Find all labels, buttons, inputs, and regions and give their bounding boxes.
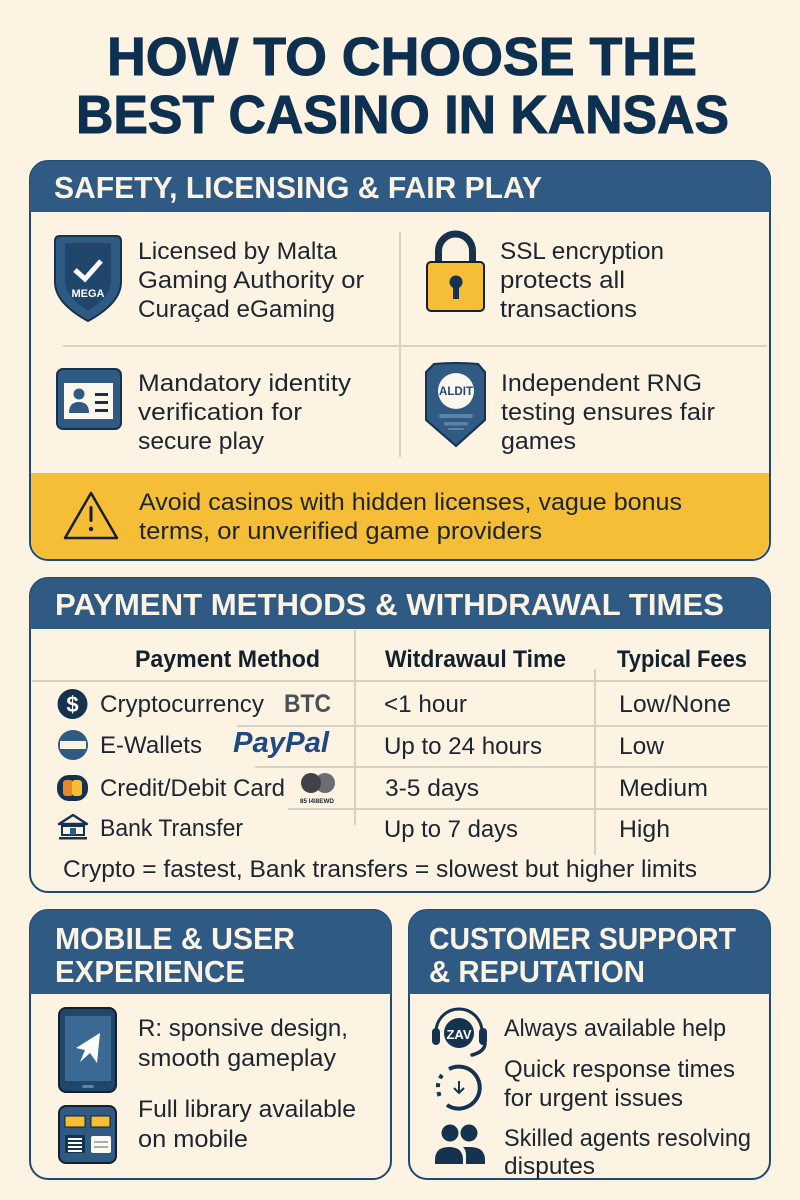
warning band bbox=[31, 473, 769, 559]
row: cryptocurrency: <1 hour bbox=[384, 691, 467, 718]
panel: customer support and reputation bbox=[409, 910, 770, 1180]
text: responsive: R: sponsive design, bbox=[138, 1015, 348, 1042]
row: cryptocurrency bbox=[58, 689, 731, 719]
table header: Typical Fees bbox=[617, 646, 747, 673]
text: licensed: Curaçad eGaming bbox=[138, 296, 335, 323]
row: e-wallets: Up to 24 hours bbox=[384, 733, 542, 760]
text: identity: Mandatory identity bbox=[138, 370, 351, 397]
table header: Witdrawaul Time bbox=[385, 646, 566, 673]
text: ssl: SSL encryption bbox=[500, 238, 664, 265]
heading: payment methods: PAYMENT METHODS & WITHDRAWAL TIMES bbox=[55, 587, 724, 622]
row: bank transfer: Bank Transfer bbox=[100, 815, 243, 842]
icon: dollar coin bbox=[58, 689, 88, 719]
icon: headset bbox=[432, 1009, 487, 1055]
text: responsive: smooth gameplay bbox=[138, 1045, 336, 1072]
text: rng: testing ensures fair bbox=[501, 399, 715, 426]
text: agents: disputes bbox=[504, 1153, 595, 1180]
text: licensed bbox=[138, 238, 364, 323]
text: library: Full library available bbox=[138, 1096, 356, 1123]
row: credit card: Credit/Debit Card bbox=[100, 775, 285, 802]
text: agents bbox=[504, 1125, 751, 1180]
icon: MEGA shield bbox=[55, 236, 121, 321]
row: e-wallets: Low bbox=[619, 733, 665, 760]
text: response: Quick response times bbox=[504, 1056, 735, 1083]
text: rng: Independent RNG bbox=[501, 370, 702, 397]
text: rng bbox=[501, 370, 715, 455]
icon: agents bbox=[435, 1124, 485, 1164]
heading: support bbox=[409, 910, 770, 994]
table header bbox=[135, 646, 747, 673]
icon: audit shield bbox=[426, 363, 485, 446]
icon: clock bbox=[438, 1067, 480, 1109]
row: bank transfer bbox=[59, 815, 670, 843]
row: cryptocurrency: Low/None bbox=[619, 691, 731, 718]
text: responsive bbox=[138, 1015, 348, 1072]
icon: bank bbox=[59, 815, 87, 840]
text: agents: Skilled agents resolving bbox=[504, 1125, 751, 1152]
warning text: terms, or unverified game providers bbox=[139, 518, 542, 545]
icon: dollar coin: $ bbox=[66, 692, 79, 717]
icon: card brand logo: 85 I4I8EWD bbox=[300, 799, 335, 805]
text: identity: secure play bbox=[138, 428, 264, 455]
text: library: on mobile bbox=[138, 1126, 248, 1153]
text: licensed: Licensed by Malta bbox=[138, 238, 338, 265]
icon: card coin bbox=[57, 775, 88, 801]
heading: support: & REPUTATION bbox=[429, 954, 645, 989]
text: ssl: transactions bbox=[500, 296, 637, 323]
heading: mobile: MOBILE & USER bbox=[55, 921, 295, 956]
icon: ID card bbox=[57, 369, 121, 429]
text: rng: games bbox=[501, 428, 576, 455]
text: library bbox=[138, 1096, 356, 1153]
row: bank transfer: High bbox=[619, 816, 670, 843]
heading: mobile bbox=[30, 910, 391, 994]
row: cryptocurrency: Cryptocurrency bbox=[100, 691, 264, 718]
icon: tablet bbox=[59, 1008, 116, 1092]
title: HOW TO CHOOSE THE bbox=[107, 27, 697, 87]
heading: safety: SAFETY, LICENSING & FAIR PLAY bbox=[54, 170, 542, 205]
icon: audit shield: ALDIT bbox=[439, 384, 474, 398]
text: ssl bbox=[500, 238, 664, 323]
icon: headset: ZAV bbox=[446, 1027, 472, 1042]
icon: MEGA shield: MEGA bbox=[72, 288, 105, 300]
row: bank transfer: Up to 7 days bbox=[384, 816, 518, 843]
heading: safety bbox=[30, 161, 770, 212]
table note: Crypto = fastest, Bank transfers = slowest but higher limits bbox=[63, 856, 697, 883]
heading: payment methods bbox=[30, 578, 770, 629]
row: credit card: 3-5 days bbox=[385, 775, 479, 802]
title bbox=[76, 27, 729, 145]
panel: payment methods and withdrawal times bbox=[30, 578, 770, 892]
row: cryptocurrency: BTC bbox=[284, 690, 331, 718]
panel: safety, licensing and fair play bbox=[30, 161, 770, 560]
row: e-wallets bbox=[58, 727, 665, 760]
icon: wallet coin bbox=[58, 730, 88, 760]
text: identity: verification for bbox=[138, 399, 302, 426]
text: licensed: Gaming Authority or bbox=[138, 267, 364, 294]
icon: warning triangle bbox=[65, 493, 117, 538]
icon: padlock bbox=[427, 234, 484, 311]
warning text: Avoid casinos with hidden licenses, vague bonus bbox=[139, 489, 682, 516]
text: response bbox=[504, 1056, 735, 1112]
text: identity bbox=[138, 370, 351, 455]
row: e-wallets: PayPal bbox=[233, 727, 330, 759]
table header: Payment Method bbox=[135, 646, 320, 673]
heading: mobile: EXPERIENCE bbox=[55, 954, 245, 989]
panel: mobile and user experience bbox=[30, 910, 391, 1179]
title: BEST CASINO IN KANSAS bbox=[76, 85, 729, 145]
row: credit card: Medium bbox=[619, 775, 708, 802]
icon: card brand logo bbox=[300, 773, 335, 805]
icon: game library bbox=[59, 1106, 116, 1163]
text: response: for urgent issues bbox=[504, 1085, 683, 1112]
text: ssl: protects all bbox=[500, 267, 625, 294]
row: e-wallets: E-Wallets bbox=[100, 732, 202, 759]
text: help: Always available help bbox=[504, 1015, 726, 1042]
warning text bbox=[139, 489, 682, 545]
heading: support: CUSTOMER SUPPORT bbox=[429, 921, 736, 956]
row: credit card bbox=[57, 773, 708, 805]
